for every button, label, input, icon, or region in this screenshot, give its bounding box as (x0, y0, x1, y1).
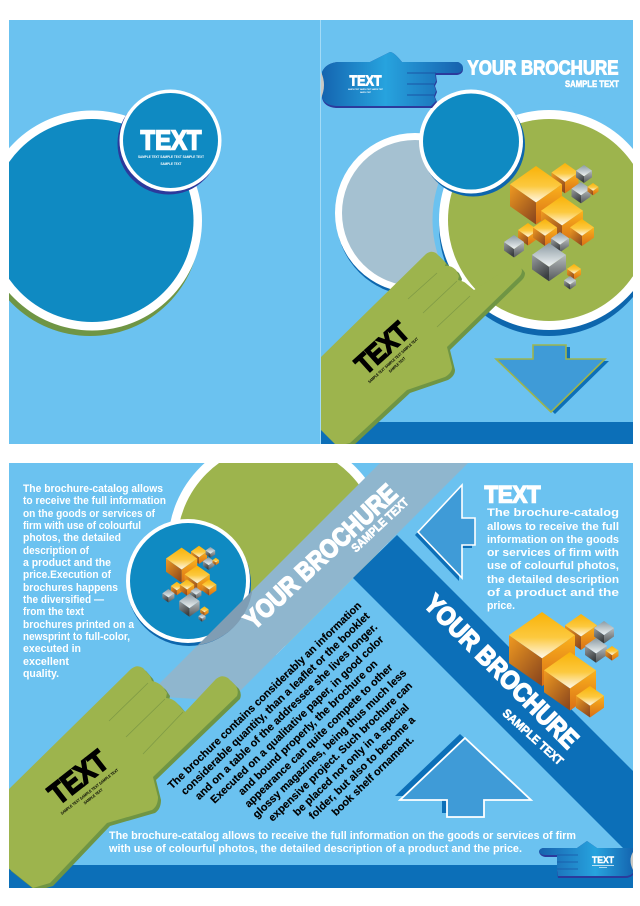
text block: right column: allows to receive the full (487, 521, 619, 533)
text block: left column: the diversified — (23, 594, 104, 606)
hand label text: SAMPLE TEXT (82, 787, 104, 805)
text block: left column: a product and the (23, 557, 111, 569)
text block: left column: newsprint to full-color, (23, 631, 130, 643)
text block: rotated body copy (166, 600, 456, 888)
text block: left column: brochures printed on a (23, 619, 135, 631)
up arrow (395, 734, 531, 817)
bottom strip (9, 865, 633, 888)
small hand label: TEXT (592, 855, 614, 865)
text block: left column: on the goods or services of (23, 508, 155, 520)
text block: left column: photos, the detailed (23, 532, 121, 544)
text block: left column: from the text (23, 606, 84, 618)
panel: front cover left (0, 20, 320, 444)
large blue circle (0, 110, 202, 336)
badge circle with text: SAMPLE TEXT (160, 161, 182, 166)
blue circle (419, 90, 525, 196)
text block: right column: of a product and the (487, 587, 619, 599)
text block: rotated body copy: Executed on a qualitative paper, in good color (208, 633, 387, 806)
blue pointing hand (321, 52, 463, 108)
text block: rotated body copy: be placed not only in a special (291, 702, 412, 819)
text block: left column: description of (23, 545, 89, 557)
blue hand label: SAMPLE TEXT SAMPLE TEXT SAMPLE TEXT (348, 88, 384, 91)
blue hand label: SAMPLE TEXT (360, 91, 372, 94)
badge circle with text: TEXT (140, 124, 202, 156)
green pointing hand (321, 252, 525, 449)
badge circle with text (118, 90, 222, 194)
text block: left column: price.Execution of (23, 569, 111, 581)
left arrow (415, 485, 475, 581)
text block: right column: use of colourful photos, (487, 560, 619, 572)
badge circle with text: SAMPLE TEXT SAMPLE TEXT SAMPLE TEXT (138, 154, 204, 159)
green pointing hand (8, 666, 241, 891)
text block: right column: The brochure-catalog (487, 507, 619, 519)
text block: left column: excellent (23, 656, 69, 668)
text block: right column: or services of firm with (487, 547, 619, 559)
text block: left column: executed in (23, 643, 81, 655)
text block: right column: the detailed description (487, 574, 619, 586)
title: SAMPLE TEXT (565, 79, 619, 90)
hand label text: TEXT (349, 316, 415, 380)
band subtitle: blue: SAMPLE TEXT (500, 706, 567, 768)
heading: TEXT: TEXT (484, 482, 541, 508)
text block: left column: quality. (23, 668, 59, 680)
text block: rotated body copy: and bound properly, the brochure on (236, 658, 380, 798)
blue hand label: TEXT (350, 72, 382, 90)
text block: rotated body copy: folder, but also to become a (307, 714, 419, 822)
hand label text: SAMPLE TEXT (388, 356, 407, 374)
bottom strip (321, 422, 633, 444)
text block: bottom caption: The brochure-catalog allows to receive the full information on the goods or services of firm (109, 830, 576, 842)
text block: rotated body copy: expensive project. Such brochure can (266, 680, 415, 824)
text block: left column: firm with use of colourful (23, 520, 141, 532)
down arrow (496, 345, 609, 414)
panel: inside spread (8, 435, 633, 891)
blue hand label (348, 72, 384, 94)
text block: rotated body copy: The brochure contains considerably an information (166, 600, 364, 792)
text block: bottom caption: with use of colourful photos, the detailed description of a product and the price. (108, 843, 522, 855)
text block: left column (23, 483, 166, 680)
text block: left column: The brochure-catalog allows (23, 483, 163, 495)
cube cluster (504, 163, 598, 290)
text block: right column: information on the goods (487, 534, 619, 546)
text block: rotated body copy: considerable quantity, than a leaflet or the booklet (179, 610, 373, 798)
cube cluster right (509, 612, 618, 718)
gray diagonal band (147, 463, 468, 701)
small blue hand (539, 841, 633, 878)
gray circle (335, 133, 438, 291)
text block: rotated body copy: glossy magazines, being thus much less (251, 667, 409, 821)
blue diagonal band (353, 535, 633, 858)
text block: right column: price. (487, 600, 515, 612)
text block: bottom caption (108, 830, 576, 855)
hand label text: TEXT (42, 744, 115, 811)
text block: left column: to receive the full information (23, 495, 166, 507)
band title: blue: YOUR BROCHURE (419, 588, 585, 754)
badge circle with cubes (123, 516, 253, 646)
band title: gray: YOUR BROCHURE (238, 478, 403, 635)
hand label text: SAMPLE TEXT SAMPLE TEXT SAMPLE TEXT (59, 767, 120, 816)
band subtitle: gray: SAMPLE TEXT (349, 495, 412, 555)
title (468, 58, 619, 90)
text block: right column (487, 507, 619, 612)
text block: rotated body copy: and on a table of the addressee she lives longer. (193, 621, 380, 803)
text block: rotated body copy: book shelf ornament. (330, 734, 417, 818)
green circle (432, 104, 640, 336)
green circle (170, 463, 388, 655)
text block: rotated body copy: appearance can quite compete to other (243, 661, 396, 810)
hand label text: SAMPLE TEXT SAMPLE TEXT SAMPLE TEXT (367, 336, 420, 384)
text block: left column: brochures happens (23, 582, 118, 594)
panel: front cover right (321, 20, 640, 449)
